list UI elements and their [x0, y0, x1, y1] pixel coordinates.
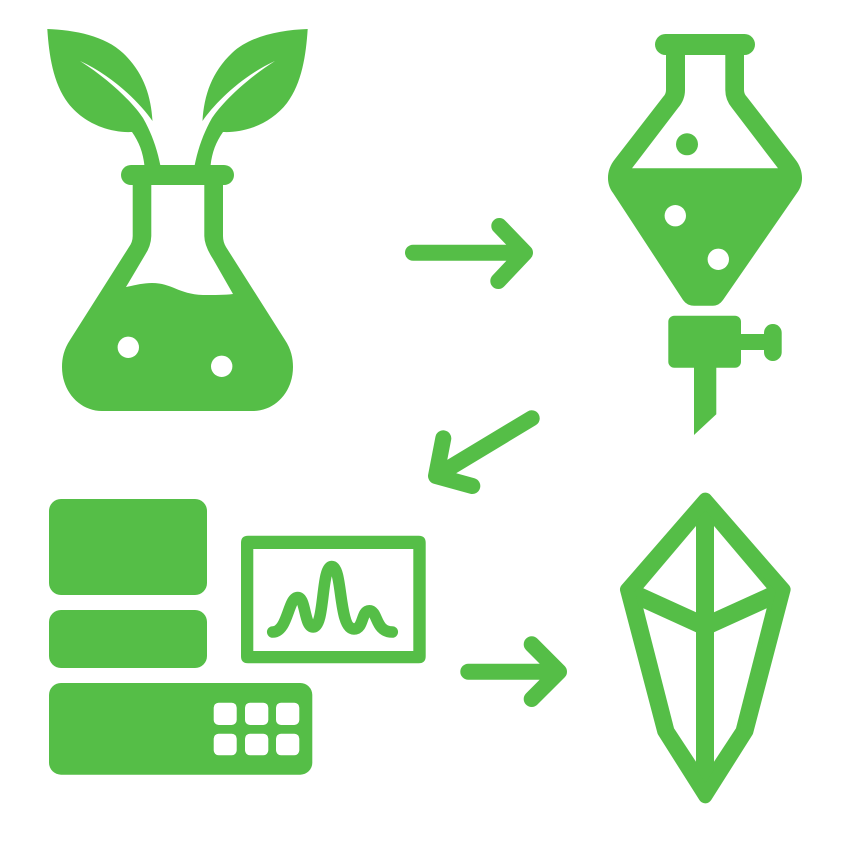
- icon: crystal: [627, 500, 784, 796]
- icon: separatory funnel: [608, 34, 802, 435]
- arrow: funnel to analyzer: [436, 418, 532, 486]
- flask rim: [121, 165, 234, 185]
- chromatogram peaks: [273, 566, 392, 632]
- keypad: [214, 703, 299, 755]
- funnel bubbles: [676, 133, 698, 155]
- funnel body: [608, 50, 802, 306]
- lower module: [49, 683, 312, 775]
- funnel rim: [655, 34, 755, 55]
- crystal outline: [627, 500, 784, 796]
- arrow: flask to funnel: [413, 226, 525, 281]
- flask bubbles: [118, 337, 139, 358]
- left leaf: [47, 29, 160, 166]
- upper module: [49, 499, 207, 595]
- crystal facets: [643, 526, 767, 762]
- middle module: [49, 610, 207, 668]
- right leaf: [194, 29, 308, 166]
- stopcock: [668, 316, 782, 435]
- icon: flask with plant: [47, 29, 308, 411]
- icon: analytical instrument: [49, 499, 426, 775]
- flask body with liquid: [62, 180, 293, 411]
- monitor frame: [241, 536, 426, 663]
- arrow: analyzer to crystal: [468, 644, 559, 699]
